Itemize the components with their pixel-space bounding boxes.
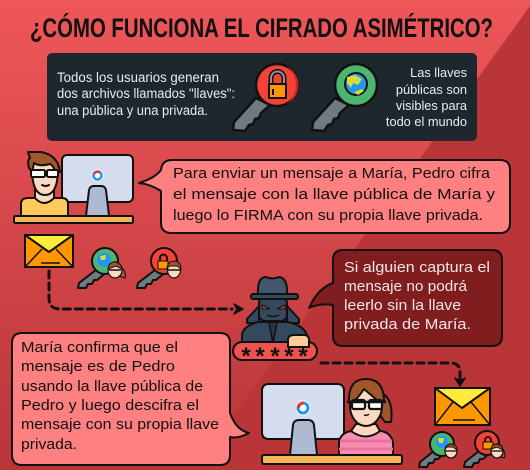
person: Pedro bbox=[21, 152, 68, 216]
password field bbox=[233, 342, 317, 370]
desk bbox=[262, 455, 402, 464]
speech bubble: spy warning: mensaje no podrá bbox=[344, 278, 468, 295]
speech bubble: Pedro bbox=[139, 160, 510, 233]
text block: public keys visible: públicas son bbox=[396, 82, 467, 97]
speech bubble: María: Pedro y luego descifra el bbox=[21, 397, 199, 414]
speech bubble: spy warning bbox=[309, 250, 502, 346]
icon: María's private key bbox=[464, 431, 505, 467]
monitor bbox=[262, 384, 344, 455]
icon: private key bbox=[233, 64, 299, 131]
text block: public keys visible: visibles para bbox=[396, 98, 468, 113]
speech bubble: María: María confirma que el bbox=[21, 339, 178, 356]
icon: Pedro's public key bbox=[419, 432, 457, 467]
password field: * bbox=[284, 343, 294, 370]
speech bubble: María bbox=[12, 333, 249, 465]
text block: users generate keys: dos archivos llamados "llaves": bbox=[57, 86, 235, 101]
text block: users generate keys bbox=[57, 70, 235, 118]
desk bbox=[14, 216, 133, 223]
icon: Pedro's private key bbox=[137, 248, 181, 288]
icon: Pedro at computer bbox=[14, 152, 133, 223]
icon: spy hacker bbox=[233, 277, 317, 370]
speech bubble: Pedro: el mensaje con la llave pública de María y bbox=[173, 186, 496, 203]
icon: envelope received bbox=[435, 388, 490, 425]
text block: users generate keys: Todos los usuarios generan bbox=[57, 70, 219, 85]
speech bubble: Pedro: luego lo FIRMA con su propia llave privada. bbox=[173, 207, 483, 224]
arrow: envelope to spy bbox=[49, 271, 243, 314]
arrow: spy to envelope bbox=[321, 363, 465, 386]
speech bubble: spy warning: privada de María. bbox=[344, 316, 471, 333]
password field: * bbox=[255, 343, 265, 370]
password field: * bbox=[241, 343, 251, 370]
speech bubble: María: privada. bbox=[21, 436, 77, 453]
text block: public keys visible: todo el mundo bbox=[386, 114, 467, 129]
monitor bbox=[62, 155, 133, 216]
speech bubble: spy warning: leerlo sin la llave bbox=[344, 297, 461, 314]
icon: envelope bbox=[25, 235, 73, 267]
speech bubble: spy warning: Si alguien captura el bbox=[344, 259, 490, 276]
speech bubble: María: mensaje con su propia llave bbox=[21, 416, 219, 433]
password field: * bbox=[270, 343, 280, 370]
password field: * bbox=[298, 343, 308, 370]
person: María bbox=[339, 379, 393, 455]
speech bubble: María: usando la llave pública de bbox=[21, 378, 203, 395]
icon: María's public key bbox=[78, 248, 125, 288]
text block: public keys visible bbox=[386, 65, 468, 129]
text block: public keys visible: Las llaves bbox=[410, 65, 467, 80]
text block: users generate keys: una pública y una privada. bbox=[57, 103, 208, 118]
icon: public key bbox=[312, 64, 377, 131]
panel: key explanation bbox=[47, 53, 477, 141]
icon: María at computer bbox=[262, 379, 402, 464]
speech bubble: María: mensaje es de Pedro bbox=[21, 358, 175, 375]
speech bubble: Pedro: Para enviar un mensaje a María, Pedro cifra bbox=[173, 165, 491, 182]
